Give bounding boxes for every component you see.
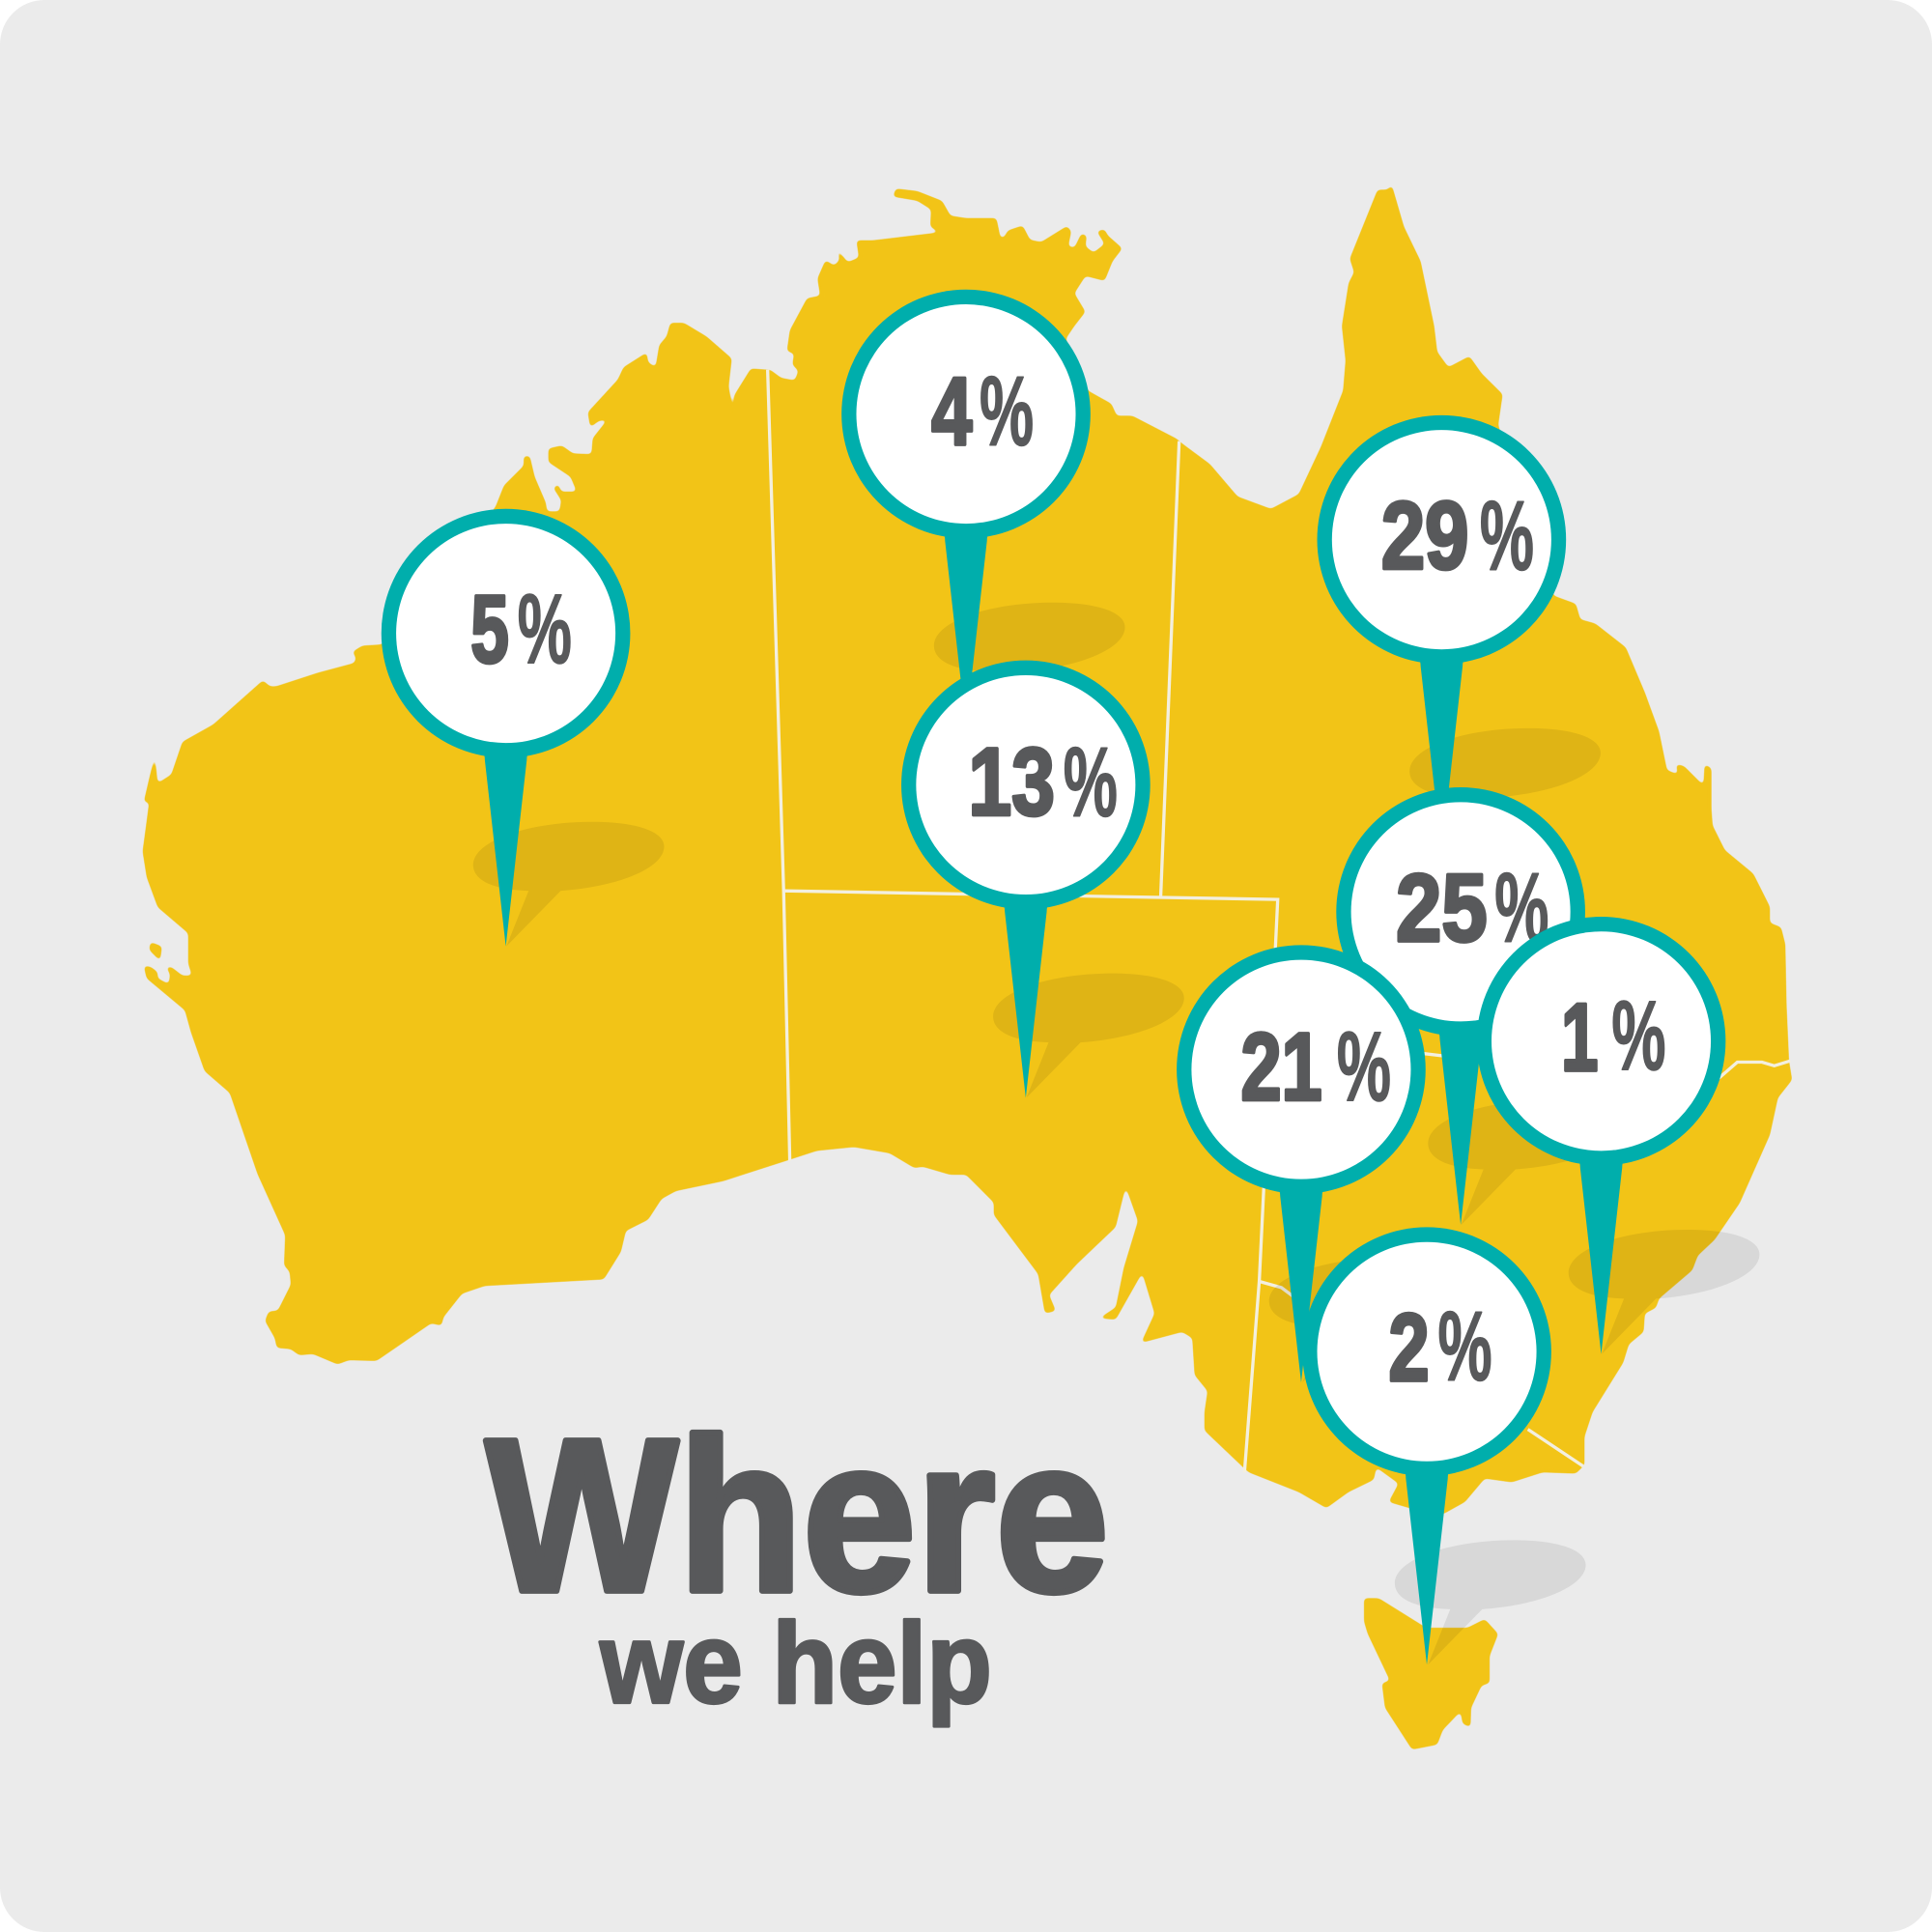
pin: 13%: 13 xyxy=(969,729,1055,837)
mainland xyxy=(143,185,1792,1515)
land masses xyxy=(143,185,1792,1749)
pin: 25%: 25 xyxy=(1396,855,1488,962)
pin: 25% xyxy=(1336,787,1585,1225)
pin: 13% xyxy=(901,661,1151,1097)
pin: 1%: % xyxy=(1611,980,1665,1091)
title: Where: Where xyxy=(486,1394,1109,1637)
pin: 5%: 5 xyxy=(470,577,509,684)
pin: 2%: 2 xyxy=(1389,1294,1430,1402)
pin: 25%: % xyxy=(1494,852,1548,962)
pin: 4%: % xyxy=(980,355,1034,466)
pin shadows xyxy=(473,603,1759,1664)
pin: 29%: % xyxy=(1480,480,1534,590)
Tasmania xyxy=(1364,1598,1498,1749)
pin: 21%: % xyxy=(1337,1011,1391,1122)
Dirk Hartog island xyxy=(149,942,162,961)
pin: 5% xyxy=(382,509,630,947)
pin: 1%: 1 xyxy=(1561,984,1598,1092)
pin: 21% xyxy=(1177,945,1426,1382)
pin: 1% xyxy=(1477,917,1725,1354)
pin: 4%: 4 xyxy=(931,358,972,466)
pin: 21%: 21 xyxy=(1240,1013,1322,1121)
pin: 29% xyxy=(1318,415,1566,853)
pin: 2%: % xyxy=(1438,1292,1492,1402)
pin: 2% xyxy=(1302,1227,1551,1664)
pin: 4% xyxy=(841,290,1091,727)
pin: 5%: % xyxy=(518,574,572,684)
pin: 29%: 29 xyxy=(1381,483,1468,590)
map of Australia xyxy=(143,185,1792,1749)
subtitle: we help: we help xyxy=(599,1601,992,1728)
pin: 13%: % xyxy=(1064,726,1118,837)
